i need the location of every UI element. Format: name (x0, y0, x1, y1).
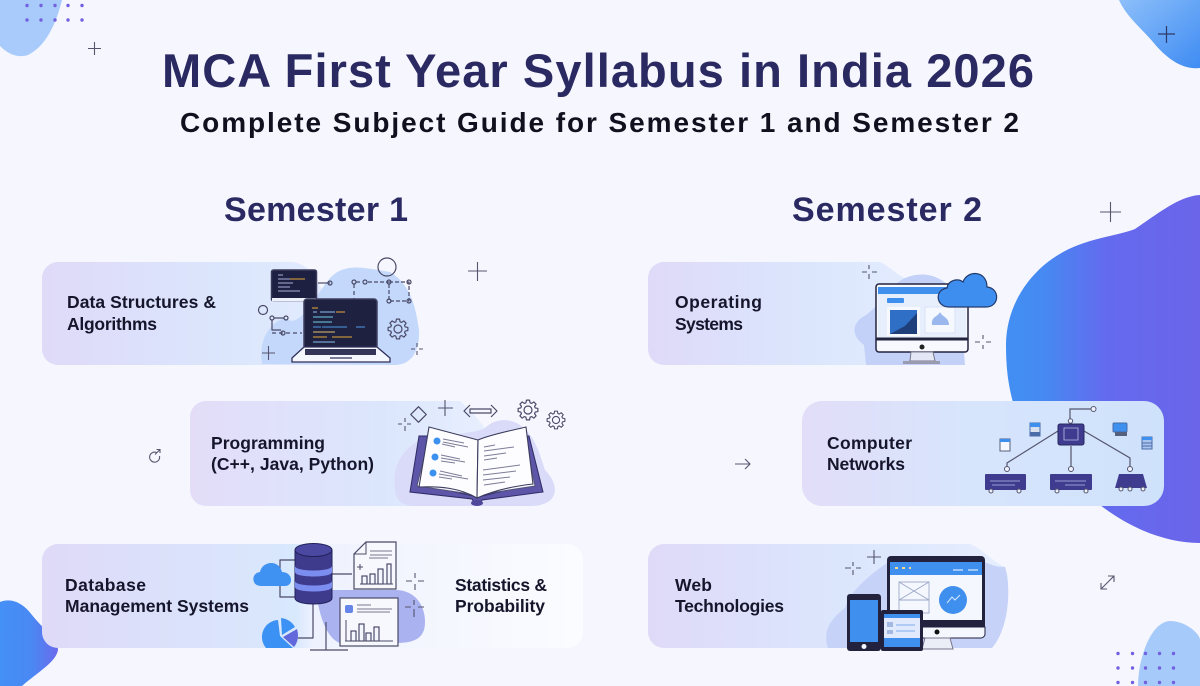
icon: sparkle (398, 418, 411, 431)
title: MCA First Year Syllabus in India 2026 (162, 44, 1034, 97)
card label: Operating (675, 292, 762, 312)
heading: semester 2: Semester 2 (792, 191, 982, 229)
heading: semester 1: Semester 1 (224, 191, 408, 229)
icon: network (985, 406, 1147, 493)
card background (190, 401, 540, 506)
blob: bottom left (0, 600, 58, 686)
card label: Database (65, 575, 146, 595)
card label line 2: Systems (675, 314, 743, 334)
icon: document chart top (354, 542, 396, 589)
icon: sparkle (845, 562, 861, 575)
icon: pie chart (262, 618, 298, 648)
icon: document chart bottom (340, 598, 398, 646)
icon: gear large (518, 400, 538, 420)
blob: large right (1006, 195, 1200, 543)
icon: plus top right (1158, 26, 1175, 43)
dots: top left (25, 4, 84, 22)
blob: bottom right (1138, 621, 1200, 686)
illustration blob (316, 590, 425, 643)
card background (42, 544, 583, 648)
icon: open book (410, 427, 543, 506)
illustration blob (261, 268, 419, 365)
icon: cloud (253, 563, 291, 586)
icon: diamond (411, 407, 426, 422)
icon: smartphone (847, 594, 881, 651)
icon: tablet (881, 610, 923, 651)
icon: plus (262, 346, 275, 360)
icon: gear small (547, 411, 565, 429)
icon: plus top left (88, 42, 101, 55)
card background (648, 544, 1008, 648)
icon: gear (388, 319, 408, 339)
icon: monitor (876, 284, 968, 364)
illustration blob (394, 420, 555, 506)
decorative icon: right arrow (735, 459, 750, 469)
decorative icon: diagonal arrow (1101, 576, 1114, 589)
card label: Computer (827, 433, 912, 453)
icon: plus (867, 550, 881, 564)
subtitle: Complete Subject Guide for Semester 1 and Semester 2 (180, 107, 1019, 138)
icon: sparkle (411, 343, 423, 355)
card label line 2: Algorithms (67, 314, 157, 334)
icon: sparkle bottom (405, 600, 424, 617)
card label right line 2: Probability (455, 596, 545, 616)
icon: plus (438, 400, 453, 416)
illustration blob (826, 558, 1008, 648)
card label: Web (675, 575, 712, 595)
card background (802, 401, 1164, 506)
icon: cloud (938, 274, 997, 307)
card label: Data Structures & (67, 292, 216, 312)
panel: computer networks (802, 401, 1164, 506)
icon: sparkle top (862, 265, 877, 279)
card background (42, 262, 380, 365)
panel: programming (190, 400, 565, 506)
card label line 2: Technologies (675, 596, 784, 616)
blob: top left (0, 0, 62, 56)
card label right: Statistics & (455, 575, 547, 595)
card label line 2: Management Systems (65, 596, 249, 616)
illustration blob (854, 274, 965, 365)
icon: code window (272, 270, 316, 302)
dots: bottom right (1116, 652, 1175, 684)
panel: data structures (42, 258, 423, 365)
blob: top right (1119, 0, 1200, 68)
card label line 2: (C++, Java, Python) (211, 454, 374, 474)
icon: connectors (258, 258, 411, 335)
icon: small devices (1000, 423, 1152, 451)
panel: database and statistics (42, 542, 583, 650)
card label: Programming (211, 433, 325, 453)
icon: code arrows (464, 405, 497, 417)
decorative icon: plus (468, 262, 487, 281)
card label line 2: Networks (827, 454, 905, 474)
card background (648, 262, 945, 365)
icon: sparkle bottom (975, 335, 991, 349)
panel: operating systems (648, 262, 997, 365)
decorative icon: circle arrow (150, 450, 160, 462)
icon: connectors (280, 560, 352, 650)
icon: sparkle top (406, 573, 424, 590)
icon: laptop (292, 299, 390, 362)
icon: desktop monitor (887, 556, 985, 649)
decorative icon: plus right (1100, 202, 1121, 222)
panel: web technologies (648, 544, 1008, 651)
icon: database (295, 544, 332, 604)
